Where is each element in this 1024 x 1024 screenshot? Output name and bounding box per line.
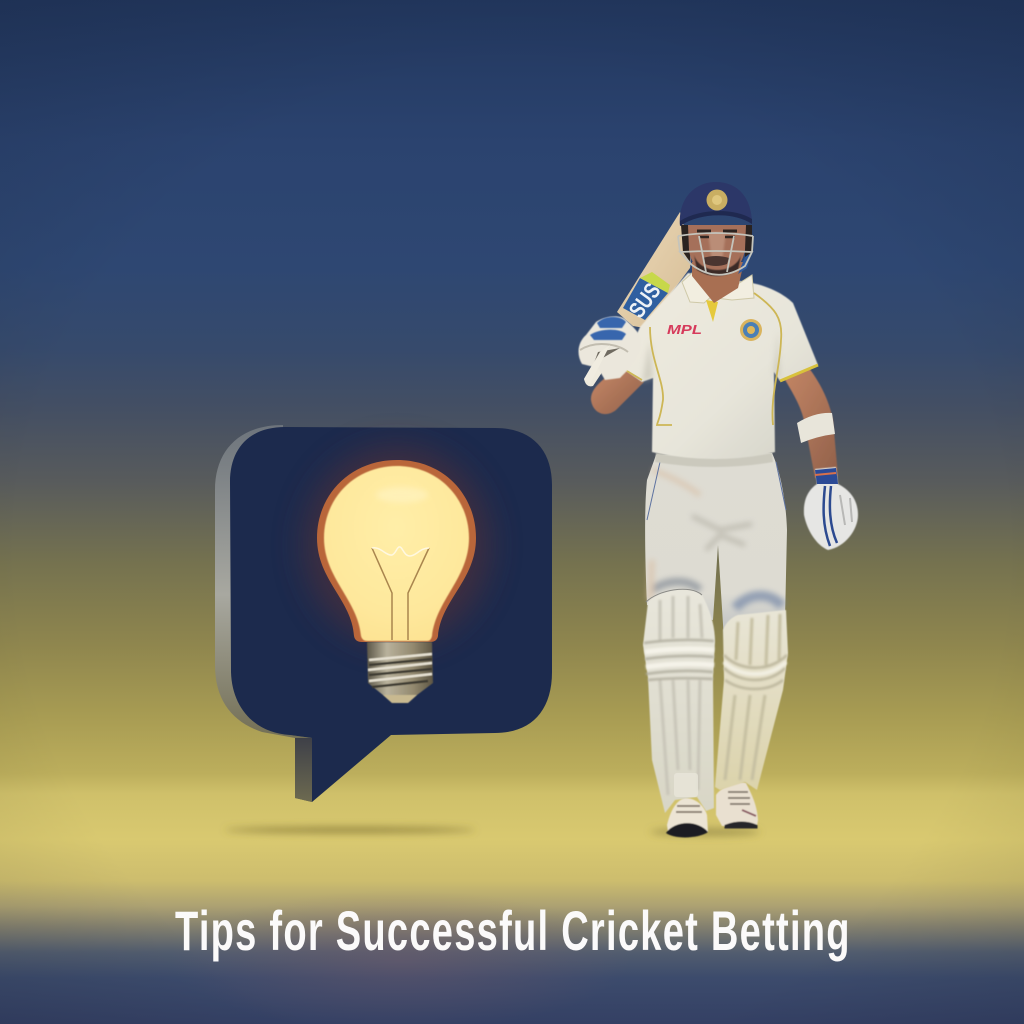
helmet bbox=[678, 182, 753, 275]
neck and head bbox=[681, 225, 752, 303]
yellow piping bbox=[622, 293, 781, 425]
jersey bbox=[622, 273, 818, 460]
bulb glow on bubble bbox=[305, 447, 489, 643]
bulb glass bbox=[324, 466, 469, 641]
player figure bbox=[579, 182, 858, 837]
right batting pad bbox=[715, 610, 788, 790]
left batting pad bbox=[643, 589, 715, 813]
batting glove on bat bbox=[579, 316, 641, 384]
jersey soft shading bbox=[642, 330, 780, 382]
hanging batting glove bbox=[804, 467, 858, 550]
waistband bbox=[655, 453, 773, 467]
bulb outer halo bbox=[317, 460, 476, 642]
collar and placket bbox=[682, 273, 754, 322]
bulb screw base bbox=[367, 642, 433, 703]
right arm bbox=[773, 364, 838, 478]
bubble front face bbox=[230, 427, 552, 802]
trouser side piping bbox=[647, 462, 786, 520]
left shoe bbox=[666, 798, 708, 837]
bubble tail side bbox=[295, 738, 312, 802]
bubble side edge bbox=[215, 425, 312, 802]
cricket bat: SUS bbox=[623, 278, 666, 323]
helmet grille bbox=[678, 233, 753, 275]
title: Tips for Successful Cricket Betting bbox=[175, 901, 850, 963]
cricket bat bbox=[584, 212, 691, 386]
right shoe bbox=[716, 783, 758, 827]
filament bbox=[372, 547, 429, 640]
sponsor logo: MPL bbox=[667, 322, 702, 337]
trouser folds bbox=[650, 470, 782, 608]
crest badge bbox=[740, 319, 762, 341]
left arm bbox=[591, 366, 644, 414]
icon: speech bubble with light bulb bbox=[215, 425, 552, 802]
floor shadows bbox=[225, 827, 760, 836]
legs and trousers bbox=[645, 453, 787, 640]
helmet side strap bbox=[738, 252, 752, 274]
bulb highlight bbox=[376, 487, 428, 503]
